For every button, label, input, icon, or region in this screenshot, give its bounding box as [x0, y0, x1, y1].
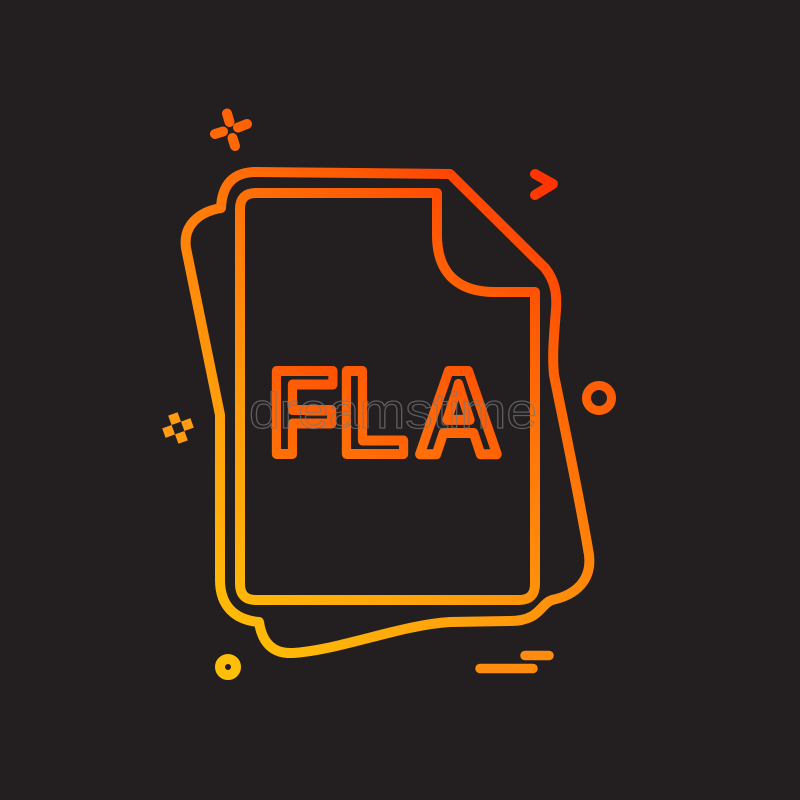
icon: front document page with folded corner [240, 193, 535, 600]
icon: back page blob [186, 172, 589, 653]
icon: dot circle [220, 659, 236, 675]
heading: FLA: L [339, 345, 407, 480]
icon: ring [586, 386, 612, 410]
heading: FLA: F [269, 345, 337, 480]
icon: four-petal sparkle [215, 114, 247, 146]
icon: speed lines [480, 656, 549, 668]
icon: checker diamond [159, 409, 197, 447]
heading: FLA: A [417, 345, 500, 481]
heading: FLA [269, 345, 500, 481]
watermark text: dreamstime [249, 383, 537, 439]
icon: chevron [535, 174, 553, 195]
